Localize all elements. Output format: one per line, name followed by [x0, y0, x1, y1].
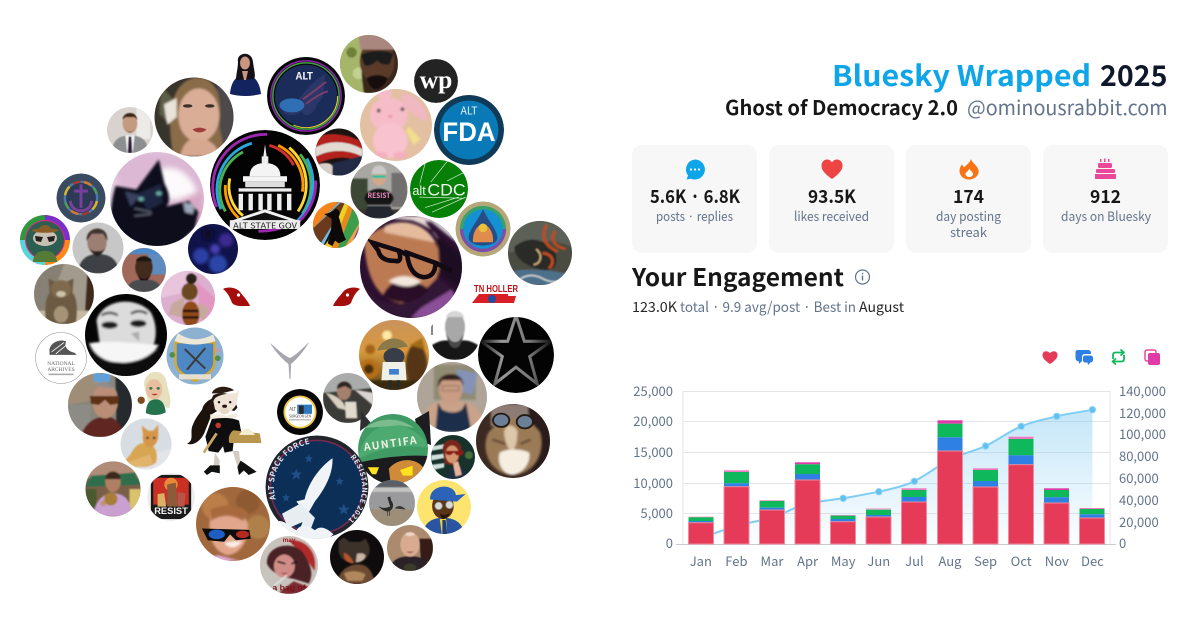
- text: engagement summary: [632, 297, 905, 317]
- avatar: cartoon man in blue cap: [417, 480, 471, 534]
- x axis months: Aug: [938, 551, 962, 570]
- avatar: raccoon park badge: [20, 215, 70, 265]
- header: display name and handle: Ghost of Democracy 2.0: [725, 92, 958, 121]
- icon: quotes squares: [1145, 350, 1160, 365]
- chart: monthly engagement: [633, 381, 1166, 570]
- y axis right labels: 120,000: [1119, 403, 1166, 422]
- avatar: pink bunny: [360, 88, 432, 161]
- avatar: national archives: [36, 333, 86, 383]
- avatar: cat with glasses: [476, 404, 550, 478]
- avatar: alt surgeon general badge: ALT: [289, 407, 296, 413]
- avatar: black star: [478, 315, 554, 393]
- heading: your engagement: Your Engagement: [631, 258, 844, 293]
- bar: Jun: [866, 508, 891, 544]
- cumulative line: [701, 406, 1096, 539]
- y axis right labels: 140,000: [1119, 381, 1166, 400]
- avatar: black kitten: [110, 152, 204, 255]
- panel: posts and replies card: [632, 145, 757, 253]
- y axis left labels: 25,000: [633, 381, 673, 400]
- icon: chat bubble: [686, 160, 705, 180]
- avatar: man in suit: [107, 107, 153, 153]
- bar: Apr: [795, 462, 820, 544]
- avatar: smiling man with glasses: [360, 216, 462, 318]
- panel: avatar cloud: [20, 35, 572, 594]
- avatar: alt FDA logo: [434, 95, 504, 165]
- x axis months: Nov: [1045, 551, 1069, 570]
- y axis right labels: 0: [1119, 533, 1126, 552]
- header: display name and handle: @ominousrabbit.com: [967, 92, 1168, 121]
- avatar: resist poster: [147, 473, 195, 521]
- panel: days on Bluesky card: 912: [1090, 183, 1121, 209]
- avatar: drop badge: [456, 202, 510, 256]
- avatar: young man: [122, 248, 166, 292]
- avatar: sunflower cat: [359, 320, 429, 390]
- avatar: woman in resist shirt: [350, 162, 408, 218]
- panel: likes card: likes received: [794, 206, 869, 225]
- icon: red bird right: [333, 288, 360, 306]
- y axis left labels: [633, 381, 673, 552]
- avatar: orange cat: [120, 418, 172, 470]
- avatar: alt state gov capitol: ALT STATE GOV: [233, 219, 297, 231]
- x axis months: Feb: [725, 551, 748, 570]
- header: title: Bluesky Wrapped: [832, 54, 1091, 95]
- panel: days on Bluesky card: [1043, 145, 1168, 253]
- y axis left labels: 10,000: [633, 473, 673, 492]
- avatar: woman in tank top: [417, 362, 487, 432]
- bar: Dec: [1080, 508, 1104, 544]
- avatar: smiling bald man: [387, 525, 433, 571]
- bar: Mar: [760, 500, 784, 544]
- text: engagement summary: August: [859, 297, 905, 317]
- x axis months: [690, 551, 1104, 570]
- x axis months: Jul: [905, 551, 924, 570]
- panel: posting streak card: streak: [950, 222, 988, 241]
- avatar: doge in robes: [187, 387, 261, 475]
- avatar: red panda: [330, 530, 384, 584]
- avatar: alt space force: ALT SPACE FORCE: [268, 438, 310, 500]
- avatar: resist poster: RESIST: [154, 506, 188, 516]
- avatar: alt surgeon general badge: [277, 389, 323, 435]
- avatar: american flag: [316, 128, 362, 176]
- avatar: anchor badge: [56, 174, 106, 222]
- bar: Aug: [938, 420, 962, 544]
- bar: May: [830, 515, 856, 544]
- avatar: alt social security badge: [267, 57, 345, 135]
- avatar: auntifa helmet cat: [358, 411, 431, 484]
- avatar: night sky: [188, 224, 238, 274]
- avatar: auntifa helmet cat: AUNTIFA: [362, 432, 419, 455]
- avatar: bearded man: [72, 222, 124, 274]
- avatar: washington post logo: wp: [420, 65, 452, 94]
- y axis right labels: 40,000: [1119, 490, 1159, 509]
- panel: likes card: [769, 145, 894, 253]
- y axis left labels: 20,000: [633, 411, 673, 430]
- icon: reposts arrows: [1112, 350, 1124, 364]
- icon: heart: [822, 160, 842, 179]
- y axis left labels: 0: [666, 533, 673, 552]
- avatar: man with sunglasses: [340, 35, 398, 93]
- panel: days on Bluesky card: days on Bluesky: [1061, 206, 1151, 225]
- avatar: man with burger: [86, 462, 140, 516]
- avatar: alt space force: RESISTANCE 2021: [348, 454, 368, 523]
- avatar: alt state gov capitol: [210, 130, 320, 240]
- icon: birthday cake: [1095, 158, 1116, 179]
- avatar: man under blanket: [323, 373, 373, 423]
- bar: Oct: [1008, 437, 1034, 544]
- avatar: dragon print: [508, 221, 572, 285]
- icon: info: [856, 270, 870, 284]
- y axis right labels: 80,000: [1119, 446, 1159, 465]
- avatar: tabby cat: [34, 264, 94, 324]
- header: title: 2025: [1100, 54, 1168, 95]
- avatar: woman in blue jacket: [230, 54, 261, 96]
- avatar: alt surgeon general badge: SURGEON GEN: [289, 414, 312, 419]
- y axis right labels: 100,000: [1119, 424, 1166, 443]
- avatar: woman with 3D glasses: [196, 487, 270, 561]
- avatar: alt space force: [266, 436, 368, 538]
- icon: red bird left: [223, 288, 250, 306]
- avatar: pride silhouette: [313, 202, 359, 248]
- x axis months: Jan: [690, 551, 712, 570]
- avatar: alt FDA logo: FDA: [442, 117, 496, 147]
- avatar: coat of arms shield: [166, 328, 224, 384]
- text: engagement summary: 123.0K: [632, 297, 677, 317]
- x axis months: Jun: [867, 551, 890, 570]
- avatar: blonde bitmoji: [138, 370, 170, 415]
- logo: TN Holler: [472, 283, 518, 303]
- panel: posts and replies card: 5.6K · 6.8K: [650, 183, 741, 209]
- x axis months: Apr: [797, 551, 819, 570]
- bar: Jul: [902, 488, 926, 544]
- legend: metric icons: [1042, 350, 1160, 365]
- x axis months: Sep: [974, 551, 997, 570]
- header: display name and handle: [725, 92, 1168, 121]
- avatar: alt FDA logo: ALT: [461, 104, 477, 119]
- avatar: alt CDC logo: [410, 160, 468, 218]
- x axis months: Dec: [1081, 551, 1104, 570]
- avatar: hand over child's mouth: [85, 294, 167, 376]
- y axis right labels: [1119, 381, 1166, 552]
- avatar: pin-up poster: may: [283, 537, 296, 544]
- avatar: man with orange sunglasses: [68, 373, 132, 437]
- avatar: bird on beach: [369, 480, 415, 526]
- panel: posts and replies card: posts · replies: [656, 206, 733, 225]
- stacked bars: [688, 420, 1104, 544]
- y axis left labels: 5,000: [641, 503, 673, 522]
- avatar: washington post logo: [414, 59, 458, 103]
- avatar: pin-up poster: [260, 536, 318, 594]
- avatar: woman in resist shirt: RESIST: [368, 190, 391, 201]
- y axis right labels: 20,000: [1119, 512, 1159, 531]
- logo: TN Holler: TN HOLLER: [474, 283, 518, 295]
- panel: likes card: 93.5K: [808, 183, 857, 209]
- icon: flame: [960, 159, 979, 180]
- panel: posting streak card: 174: [953, 183, 984, 209]
- y axis right labels: 60,000: [1119, 468, 1159, 487]
- avatar: bald man black and white: [430, 310, 480, 360]
- bar: Nov: [1044, 488, 1069, 544]
- panel: posting streak card: day posting: [936, 206, 1002, 225]
- avatar: woman with red sunglasses: [431, 435, 475, 479]
- avatar: alt social security badge: ALT: [295, 68, 314, 83]
- text: engagement summary: total · 9.9 avg/post · Best in: [680, 297, 856, 317]
- avatar: national archives: ARCHIVES: [47, 367, 75, 373]
- avatar: national archives: NATIONAL: [47, 361, 75, 367]
- cumulative area: [701, 410, 1092, 544]
- y axis left labels: 15,000: [633, 442, 673, 461]
- avatar: alt CDC logo: alt: [412, 183, 426, 198]
- x axis months: Mar: [761, 551, 784, 570]
- bar: Sep: [973, 468, 998, 544]
- bar: Feb: [724, 470, 749, 544]
- avatar: pin-up poster: a bag of: [272, 583, 306, 593]
- avatar: alt CDC logo: CDC: [427, 181, 466, 199]
- avatar: bee on pink: [161, 271, 215, 327]
- bar: Jan: [688, 517, 714, 544]
- panel: posting streak card: [906, 145, 1031, 253]
- icon: likes heart: [1042, 351, 1058, 364]
- avatar: woman selfie: [154, 77, 234, 156]
- icon: gray Y logo: [270, 342, 309, 379]
- x axis months: Oct: [1011, 551, 1032, 570]
- x axis months: May: [831, 551, 856, 570]
- icon: replies bubbles: [1076, 350, 1093, 365]
